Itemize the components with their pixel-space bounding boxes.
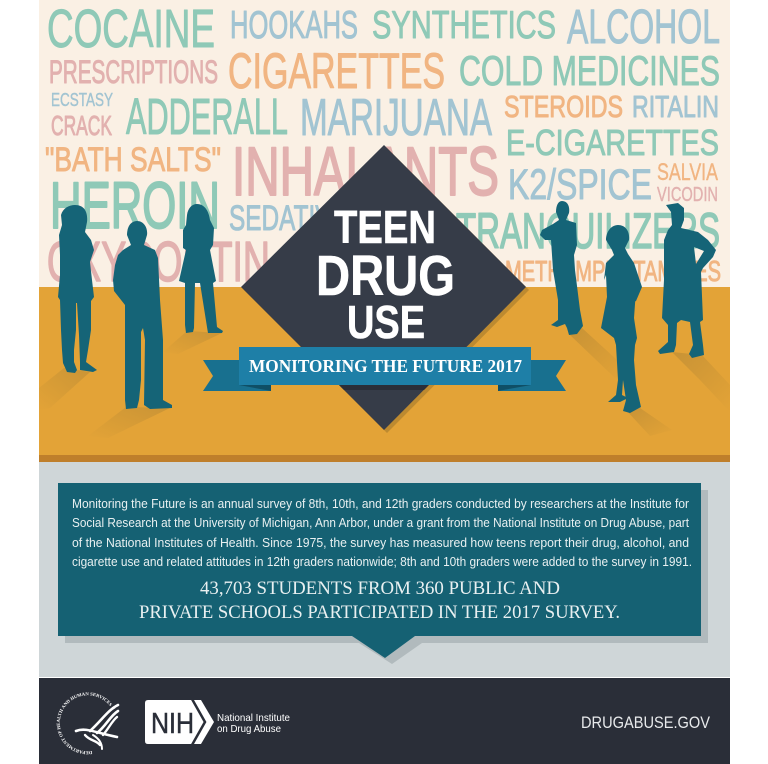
word wall: ECSTASY [51,90,113,110]
word wall: COCAINE [47,0,215,59]
callout: survey description [58,483,701,658]
participation statement: 43,703 STUDENTS FROM 360 PUBLIC AND [200,579,560,599]
word wall: ADDERALL [126,88,288,145]
word wall: OXYCONTIN [47,230,270,294]
panel: hero floor [39,287,730,462]
callout shadow [65,490,708,664]
word wall: SYNTHETICS [372,4,556,47]
logo text: National Institute on Drug Abuse [217,712,290,735]
word wall: CRACK [51,110,112,141]
icon: HHS seal: DEPARTMENT OF HEALTH AND HUMAN SERVICES USA [56,692,116,754]
word wall: CIGARETTES [228,43,445,99]
panel: hero wall [39,0,730,287]
title: DRUG [316,244,455,308]
description text: cigarette use and related attitudes in 12th graders nationwide; 8th and 10th graders were added to the survey in 1991. [72,554,692,569]
title: TEEN [334,201,436,253]
silhouettes of teens [58,201,716,413]
word wall: HOOKAHS [230,4,358,47]
ribbon [203,347,566,391]
description text: of the National Institutes of Health. Since 1975, the survey has measured how teens report their drug, alcohol, and [72,535,689,550]
word wall: K2/SPICE [508,161,652,209]
icon: HHS seal [56,692,120,754]
word wall: RITALIN [632,89,719,124]
word wall: "BATH SALTS" [45,141,221,179]
ribbon label: MONITORING THE FUTURE 2017 [249,356,522,376]
word wall: SALVIA [657,159,718,186]
website: DRUGABUSE.GOV [581,713,711,732]
logo: NIH [145,699,214,745]
word wall [45,0,721,294]
description text: Monitoring the Future is an annual survey of 8th, 10th, and 12th graders conducted by researchers at the Institute for [72,496,690,511]
panel: footer [39,678,730,764]
title diamond [241,145,526,430]
word wall: HEROIN [50,168,220,242]
title: USE [347,296,425,348]
title [316,201,455,348]
panel: survey section background [39,462,730,677]
word wall: E-CIGARETTES [506,122,719,163]
participation statement [139,579,620,623]
description text: Social Research at the University of Michigan, Ann Arbor, under a grant from the National Institute on Drug Abuse, part [72,515,689,530]
figure shadows [39,328,730,438]
word wall: STEROIDS [504,89,623,124]
logo text: National Institute on Drug Abuse: on Drug Abuse [217,723,281,735]
description text [72,496,692,569]
logo: NIH: NIH [151,708,194,740]
diamond shadow [244,148,529,433]
word wall: SEDATIVES [229,199,364,238]
word wall: MARIJUANA [300,89,492,147]
word wall: INHALANTS [232,133,499,210]
word wall: VICODIN [657,184,718,206]
word wall: PRESCRIPTIONS [49,54,218,90]
logo text: National Institute on Drug Abuse: National Institute [217,712,290,724]
participation statement: PRIVATE SCHOOLS PARTICIPATED IN THE 2017 SURVEY. [139,603,620,623]
